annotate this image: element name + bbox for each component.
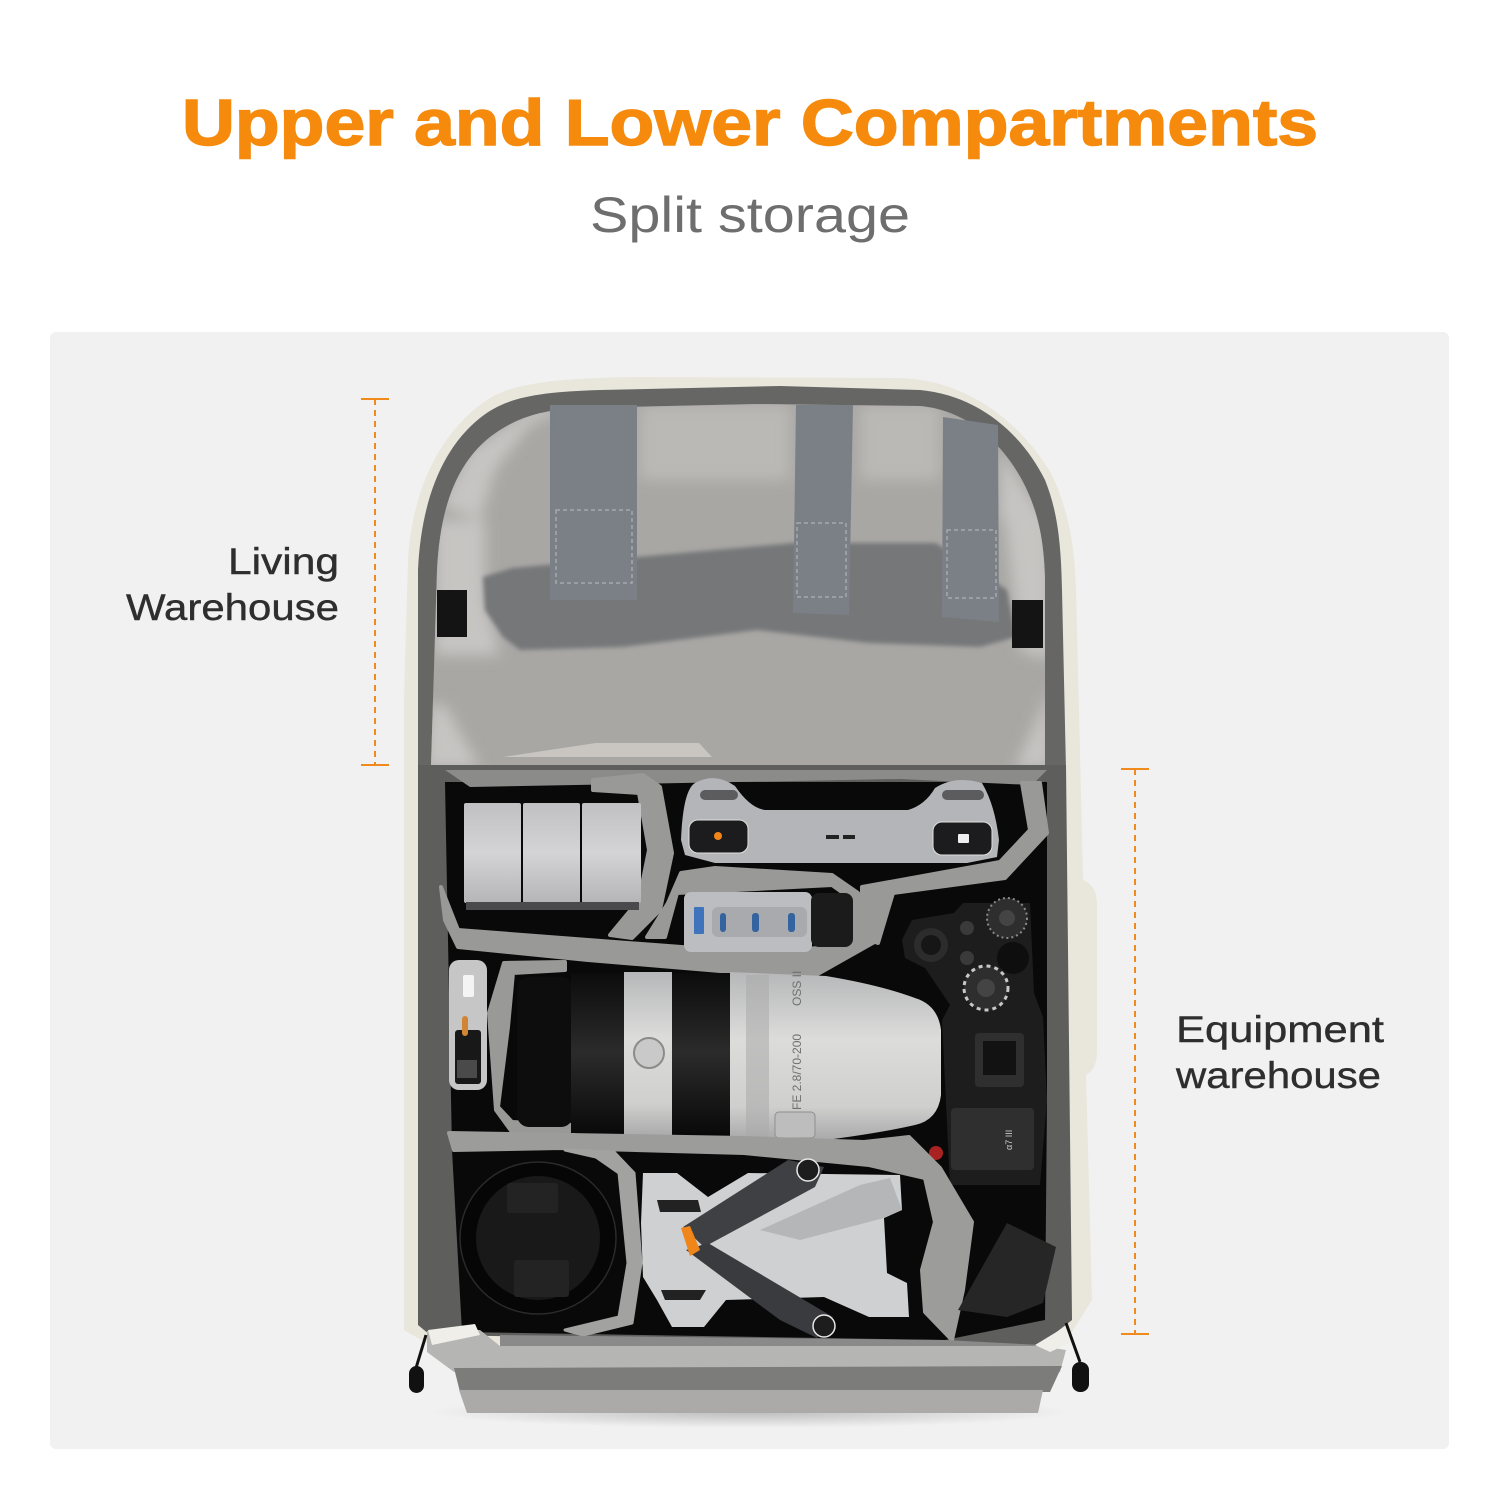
upper size bracket xyxy=(361,399,389,765)
side buckle left xyxy=(437,590,467,637)
storage pouch xyxy=(958,1223,1056,1317)
label: living warehouse xyxy=(126,541,339,628)
camera body: α7 III xyxy=(1004,1130,1014,1150)
lens pad wall xyxy=(489,962,574,1132)
folded drone xyxy=(641,1159,909,1338)
charger pad arch xyxy=(647,868,864,937)
camera body xyxy=(902,898,1047,1185)
battery pad wall xyxy=(593,775,672,938)
padded dividers xyxy=(441,775,1047,1132)
upper mesh compartment xyxy=(431,404,1045,765)
drone controller xyxy=(681,778,999,863)
telephoto lens: FE 2.8/70-200 xyxy=(790,1034,804,1110)
backpack xyxy=(404,377,1097,1428)
lower size bracket xyxy=(1121,769,1149,1334)
label: equipment warehouse: Equipment xyxy=(1176,1009,1385,1050)
light mesh panels xyxy=(425,400,1050,768)
top pad xyxy=(445,770,1047,787)
compartment floor xyxy=(445,782,1047,1340)
strap right xyxy=(942,417,999,622)
label: living warehouse: Warehouse xyxy=(126,587,339,628)
lens cap pad wall xyxy=(565,1150,641,1335)
lower compartment wall xyxy=(418,765,1072,1345)
backpack shell xyxy=(404,377,1097,1345)
bottom flap xyxy=(427,1324,1072,1413)
subtitle: Split storage xyxy=(590,187,910,243)
zipper pull right xyxy=(1066,1323,1089,1392)
bottom pad band xyxy=(449,1133,972,1340)
strap left xyxy=(550,405,637,600)
label: equipment warehouse: warehouse xyxy=(1175,1055,1381,1096)
charger xyxy=(684,892,853,952)
zipper pull left xyxy=(409,1335,426,1393)
zipper band xyxy=(418,386,1066,770)
light mesh fold xyxy=(503,743,712,757)
label: living warehouse: Living xyxy=(228,541,339,582)
panel: product background xyxy=(50,332,1449,1449)
ground shadow xyxy=(430,1396,1070,1428)
strap middle xyxy=(793,405,853,615)
title: Upper and Lower Compartments xyxy=(182,86,1318,159)
lens cap xyxy=(460,1162,616,1314)
power bank xyxy=(449,960,487,1090)
side buckle right xyxy=(1012,600,1043,648)
packed clothing shadow xyxy=(483,543,1016,650)
controller pad wall xyxy=(862,783,1047,943)
long pad band xyxy=(441,887,878,975)
telephoto lens xyxy=(517,971,941,1140)
batteries xyxy=(464,803,641,910)
telephoto lens: OSS II xyxy=(790,971,804,1006)
label: equipment warehouse xyxy=(1175,1009,1385,1096)
